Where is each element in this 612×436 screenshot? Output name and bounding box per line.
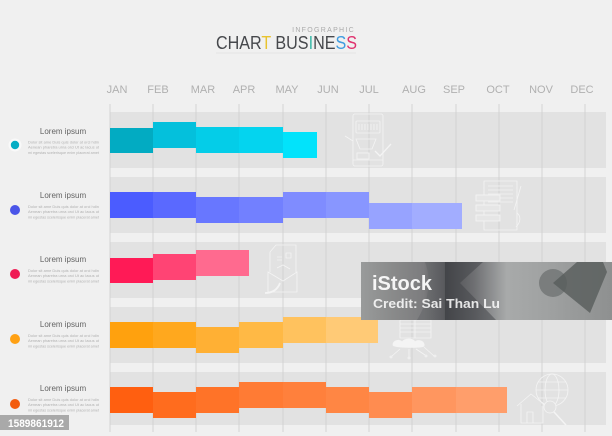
month axis labels (107, 84, 594, 96)
month axis labels: NOV (529, 84, 554, 96)
row 3 label: Dolor sit ame Duis quis dolor at orci hdin (28, 269, 99, 273)
row 2 label (10, 191, 99, 220)
row 5 label: Dolor sit ame Duis quis dolor at orci hdin (28, 398, 99, 402)
month axis labels: OCT (486, 84, 510, 96)
row 3 bars (110, 250, 249, 283)
icon: building with network (390, 320, 436, 359)
icon: documents with pen (476, 181, 521, 230)
icon: phone shopping cart with check (345, 114, 391, 166)
row 1 label: Aenean pharetra urna orci Ut ac lacus ut (28, 146, 99, 150)
row 1 label (8, 127, 99, 155)
watermark band: Credit: Sai Than Lu (373, 297, 500, 311)
month axis labels: AUG (402, 84, 426, 96)
row 1 label: mi egestas scelerisque enim placerat amet (28, 151, 99, 155)
row 4 label: Dolor sit ame Duis quis dolor at orci hdin (28, 334, 99, 338)
icon: envelope with letter (265, 245, 297, 293)
watermark band: iStock (372, 273, 433, 295)
row 3 label (10, 255, 99, 284)
row 3 label: Aenean pharetra urna orci Ut ac lacus ut (28, 274, 99, 278)
row 2 bars (110, 192, 462, 229)
image id badge: 1589861912 (8, 418, 64, 430)
row 1 label: Dolor sit ame Duis quis dolor at orci hdin (28, 140, 99, 144)
title: INFOGRAPHIC (292, 27, 355, 34)
month axis labels: JAN (107, 84, 127, 96)
row 4 label: Aenean pharetra urna orci Ut ac lacus ut (28, 339, 99, 343)
row 5 bars (110, 382, 507, 418)
icon: house, globe and magnifier (517, 374, 568, 425)
month axis labels: FEB (147, 84, 169, 96)
month axis labels: MAR (191, 84, 215, 96)
title: CHART BUSINESS (216, 33, 357, 53)
row 2 label: Dolor sit ame Duis quis dolor at orci hdin (28, 205, 99, 209)
row 2 label: mi egestas scelerisque enim placerat amet (28, 216, 99, 220)
month axis labels: DEC (570, 84, 594, 96)
row 1 bars (110, 122, 317, 158)
month axis labels: JUL (359, 84, 379, 96)
month axis labels: SEP (443, 84, 465, 96)
month axis labels: JUN (317, 84, 339, 96)
row 5 label: Aenean pharetra urna orci Ut ac lacus ut (28, 403, 99, 407)
row 5 label: mi egestas scelerisque enim placerat amet (28, 408, 99, 412)
row 5 label (10, 384, 99, 412)
month axis labels: MAY (275, 84, 299, 96)
row 2 label: Lorem ipsum (40, 191, 86, 200)
row background panels (110, 112, 606, 425)
row 4 label (10, 320, 99, 348)
month axis labels: APR (233, 84, 255, 96)
row 4 label: mi egestas scelerisque enim placerat amet (28, 344, 99, 348)
row 3 label: mi egestas scelerisque enim placerat amet (28, 280, 99, 284)
row 4 bars (110, 317, 378, 353)
watermark band (361, 262, 612, 320)
row 4 label: Lorem ipsum (40, 320, 86, 329)
row 1 label: Lorem ipsum (40, 127, 86, 136)
row 3 label: Lorem ipsum (40, 255, 86, 264)
row 5 label: Lorem ipsum (40, 384, 86, 393)
row 2 label: Aenean pharetra urna orci Ut ac lacus ut (28, 210, 99, 214)
